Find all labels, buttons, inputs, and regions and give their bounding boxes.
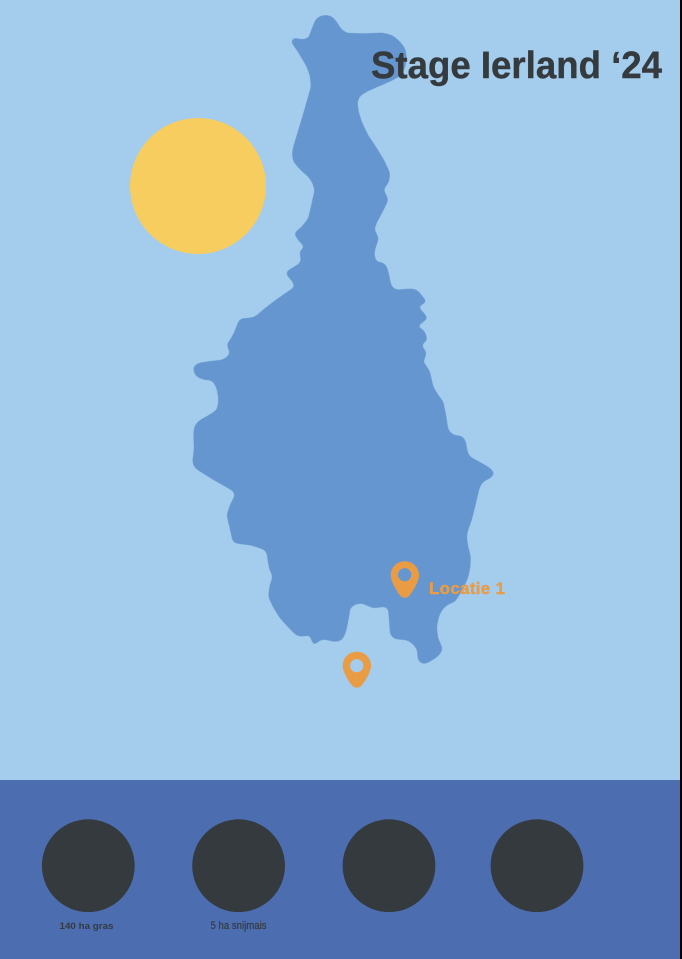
bottom band [0,780,680,959]
edge strip [680,0,682,959]
sun [130,118,266,254]
icon: location pin 1 [391,561,419,598]
stat 4: circle [491,819,583,912]
icon: location pin 2 [343,652,371,688]
label: Locatie 1: Locatie 1 [429,579,505,598]
map: Ireland island shape [192,15,495,664]
stat 1: circle and label [42,819,135,932]
stat 2: circle and label: 5 ha snijmais [210,920,267,932]
title: Stage Ierland ‘24 [371,45,662,87]
stat 1: circle and label: 140 ha gras [60,921,114,932]
stat 2: circle and label [192,819,285,932]
stat 3: circle [343,819,435,912]
